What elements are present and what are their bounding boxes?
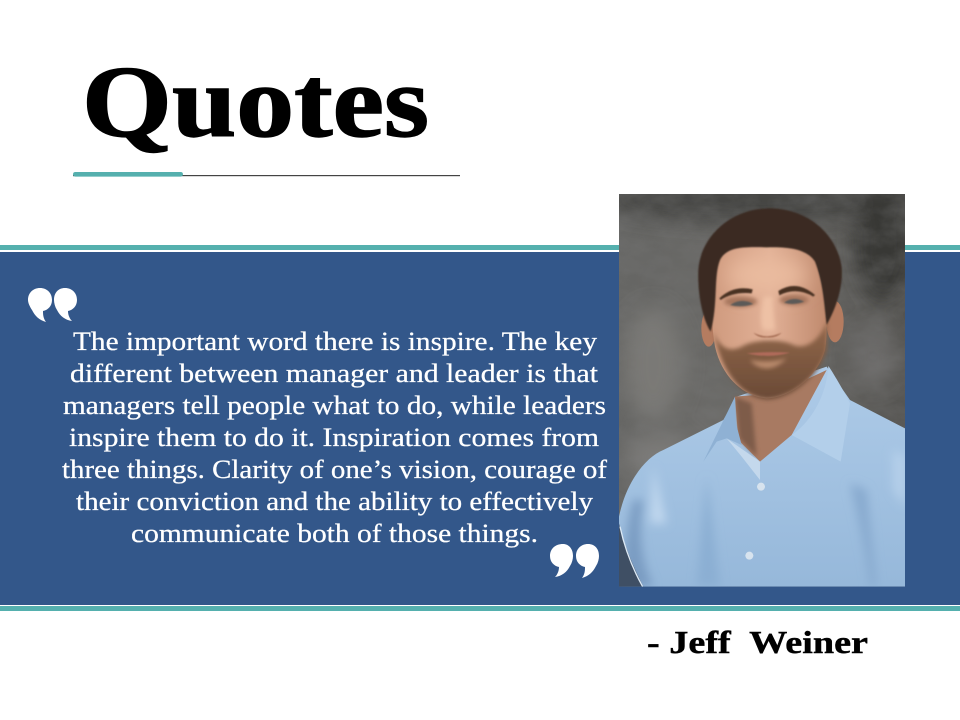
collar <box>703 397 742 462</box>
neck <box>735 370 827 462</box>
title: Quotes <box>82 46 429 159</box>
portrait photo <box>619 194 905 587</box>
title underline <box>73 172 460 177</box>
shirt <box>619 367 905 587</box>
lips <box>747 352 790 356</box>
under-lip skin <box>750 358 787 368</box>
quote text: The important word there is inspire. The key <box>73 327 597 356</box>
attribution: - Jeff Weiner <box>647 624 868 660</box>
beard <box>713 320 828 399</box>
icon: closing quotation mark <box>550 544 599 578</box>
icon: opening quotation mark <box>28 288 77 322</box>
hair <box>698 208 842 332</box>
quote text: inspire them to do it. Inspiration comes from <box>69 423 599 452</box>
quote text: different between manager and leader is that <box>70 359 599 388</box>
ears <box>701 314 714 347</box>
eyebrows <box>719 288 753 300</box>
quote text: their conviction and the ability to effectively <box>76 487 593 516</box>
nose <box>753 333 782 337</box>
panel: quote band <box>0 245 960 611</box>
quote text <box>62 327 607 548</box>
quote text: communicate both of those things. <box>131 519 538 548</box>
eyes <box>730 301 753 306</box>
buttons <box>757 483 765 491</box>
quote text: managers tell people what to do, while leaders <box>63 391 606 420</box>
quote text: three things. Clarity of one’s vision, courage of <box>62 455 607 484</box>
face <box>712 245 827 398</box>
eye sockets <box>724 295 809 307</box>
